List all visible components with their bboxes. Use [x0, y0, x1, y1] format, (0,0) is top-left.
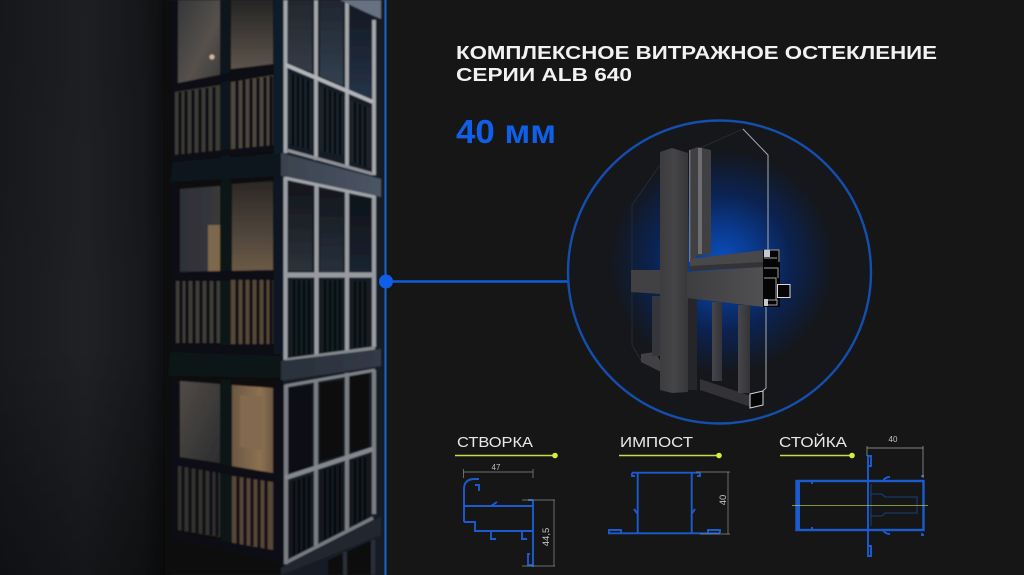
- drawing: импост: 40: [718, 495, 729, 505]
- infill bars: [712, 302, 722, 381]
- cross-section: [763, 250, 780, 307]
- drawing: стойка: СТОЙКА: [779, 433, 847, 451]
- title: СЕРИИ ALB 640: [456, 65, 632, 85]
- drawing: импост: ИМПОСТ: [620, 434, 693, 451]
- building facade photo: [165, 0, 385, 575]
- dark building wall on the left: [0, 0, 170, 575]
- transom: [690, 250, 764, 269]
- drawing: створка: [455, 434, 558, 567]
- drawing: стойка: 40: [889, 435, 898, 444]
- vertical blue line: [384, 0, 386, 575]
- round detail: aluminium profile: [568, 120, 871, 424]
- drawing: створка: 44,5: [541, 528, 552, 546]
- upper inner frame: [689, 147, 711, 262]
- drawing: створка: СТВОРКА: [457, 434, 533, 451]
- thin glass outline: [632, 129, 743, 362]
- drawing: стойка: [779, 433, 928, 557]
- lower rail cross-section: [750, 391, 763, 408]
- bright glass edges: [743, 129, 768, 400]
- left stub of transom: [631, 270, 661, 294]
- drawing: импост: [608, 434, 730, 534]
- title: КОМПЛЕКСНОЕ ВИТРАЖНОЕ ОСТЕКЛЕНИЕ: [456, 43, 937, 63]
- balcony floor 1: [170, 0, 381, 197]
- glass thickness value: 40 мм: [456, 113, 556, 150]
- balcony floor 3: [168, 370, 381, 575]
- connector from building to round detail: [379, 274, 568, 288]
- drawing: створка: 47: [492, 463, 501, 472]
- balcony floor 2: [168, 176, 381, 381]
- rear horizontal rail: [700, 379, 751, 407]
- title: [456, 43, 937, 85]
- main mullion: [660, 148, 688, 393]
